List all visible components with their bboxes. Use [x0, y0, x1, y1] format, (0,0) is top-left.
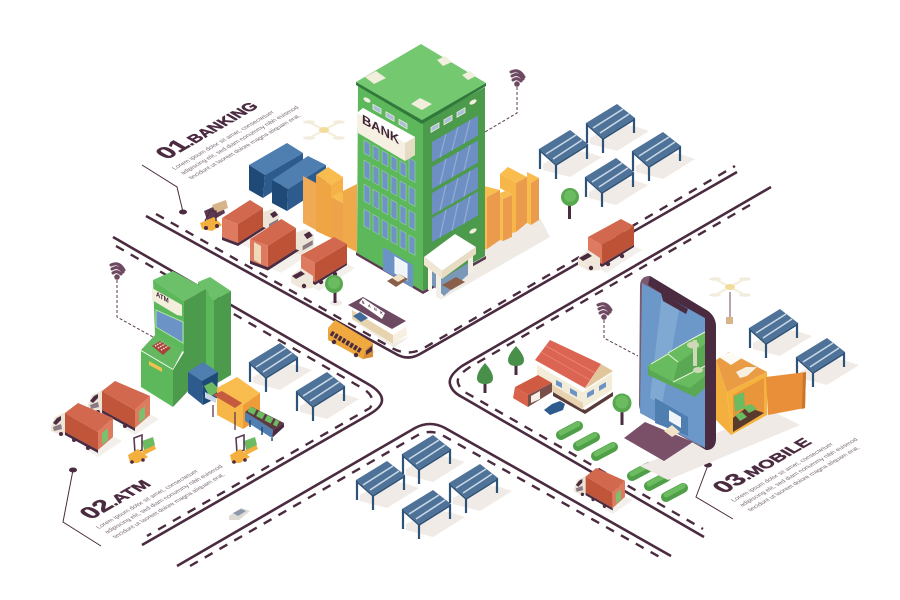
orange warehouse: left cluster: [303, 167, 357, 252]
road: bottom block: [177, 424, 671, 566]
leader dot: banking: [179, 210, 187, 214]
portico steps: [442, 277, 465, 290]
icon: wifi: [598, 304, 611, 320]
banknote strap: [693, 340, 697, 366]
console top: [141, 335, 183, 369]
body text: mobile: adipiscing elit, sed diam nonummy nibh euismod: [738, 437, 860, 508]
road: ATM block: [113, 237, 382, 545]
ATM machine: [141, 271, 231, 407]
phone door: [655, 398, 688, 436]
icon: wifi: [511, 71, 524, 87]
road: banking block: [146, 166, 737, 358]
red truck: front: [291, 237, 355, 291]
dotted connector: [485, 87, 517, 132]
drone: [709, 277, 751, 297]
red truck: ATM upper: [88, 381, 159, 435]
road network: [113, 166, 771, 566]
house side wall: [583, 373, 612, 408]
leader line: ATM: [63, 470, 101, 546]
tree: top right: [561, 188, 579, 219]
body text: banking: adipiscing elit, sed diam nonummy nibh euismod: [179, 105, 301, 176]
bank left windows: [364, 132, 415, 255]
safe interior: [733, 378, 764, 432]
house base: [553, 392, 613, 414]
kiosk sign text: BANK: [362, 299, 383, 316]
conveyor front: [245, 407, 284, 441]
safe top: [716, 352, 767, 392]
phone base plate: [624, 422, 693, 461]
ATM sign text: ATM: [156, 291, 169, 305]
safe with money: [640, 352, 806, 480]
ground shadow: bank plaza: [440, 218, 550, 300]
heading: 01.BANKING: 01.BANKING: [149, 96, 264, 163]
leader dot: ATM: [69, 468, 77, 472]
body text: ATM: adipiscing elit, sed diam nonummy nibh euismod: [103, 464, 225, 535]
BANK sign text: BANK: [362, 111, 400, 148]
bank upper small windows: [373, 104, 407, 129]
section: 02 ATM label: [63, 459, 234, 546]
forklift: ATM right: [230, 435, 258, 464]
red truck: mobile road: [574, 468, 632, 514]
small white car: [229, 508, 250, 520]
shipping containers: [249, 143, 326, 211]
road: mobile block: [450, 187, 771, 537]
house gable: [585, 364, 613, 389]
phone steps: [664, 425, 680, 437]
section: 03 mobile label: [696, 432, 869, 519]
bench: [353, 312, 368, 322]
phone: [624, 276, 716, 461]
body text: ATM: Lorem ipsum dolor sit amet, consectetuer: [95, 469, 200, 530]
main tower: [153, 271, 206, 407]
house roof: [535, 340, 601, 388]
garage: [513, 375, 552, 407]
house front wall: [537, 365, 583, 403]
banknote stack: [648, 332, 705, 397]
tether: [729, 292, 731, 318]
keypad: [152, 341, 171, 355]
heading: 02.ATM: 02.ATM: [73, 474, 156, 523]
pine trees: [477, 346, 524, 393]
BANK sign: [357, 108, 415, 161]
bank base: [356, 252, 486, 294]
house windows: [556, 380, 606, 398]
body text: banking: tincidunt ut laoreet dolore magna aliquam erat.: [187, 113, 303, 181]
section: 01 banking label: [142, 96, 310, 214]
hedges: [561, 424, 683, 497]
rear tower: [198, 277, 231, 385]
leader dot: mobile: [704, 462, 712, 468]
container: back: [249, 143, 303, 198]
icon: wifi: [111, 264, 124, 280]
phone notch: [661, 293, 688, 314]
solar panels: ATM group: [249, 343, 359, 421]
blue car: [544, 401, 565, 415]
bank left wall: [357, 85, 423, 291]
solar panels: mobile group: [749, 309, 859, 387]
blue press machine: [188, 362, 218, 405]
body text: mobile: tincidunt ut laoreet dolore magna aliquam erat.: [746, 445, 862, 513]
tree: mobile: [612, 394, 632, 425]
yellow bus: [328, 320, 375, 360]
leader line: mobile: [696, 465, 733, 519]
body text: ATM: tincidunt ut laoreet dolore magna aliquam erat.: [111, 472, 227, 540]
bank door: [383, 247, 413, 288]
safe front: [727, 372, 767, 435]
bus stop kiosk: [348, 297, 410, 348]
red truck: road: [578, 219, 642, 273]
kiosk front wall: [352, 310, 393, 344]
mobile wifi signal: [598, 304, 638, 356]
phone screen: [640, 283, 705, 448]
body text: banking: Lorem ipsum dolor sit amet, consectetuer: [171, 110, 276, 171]
phone frame: [639, 276, 716, 450]
tree: near bank: [325, 275, 343, 306]
safe left face: [716, 360, 731, 435]
drone with parcel: [709, 277, 751, 324]
safe door: [766, 372, 806, 415]
card slot: [149, 361, 162, 372]
portico columns: [428, 262, 432, 292]
ATM wifi signal: [111, 264, 153, 337]
forklift: banking: [200, 200, 228, 231]
conveyor rear: [204, 382, 220, 397]
roof vents: [365, 56, 476, 110]
rear doors: [254, 242, 261, 264]
solar panels: bottom group: [356, 435, 512, 539]
bank right glazed panels: [432, 115, 478, 242]
portico roof: [424, 234, 476, 271]
wall light pills: [363, 96, 477, 235]
shop posts: [213, 405, 235, 430]
kiosk sign: [359, 298, 385, 319]
icon: drone banking: [303, 120, 345, 140]
heading: 03.MOBILE: 03.MOBILE: [706, 432, 817, 497]
container: front: [272, 156, 326, 211]
safe paper: [719, 352, 742, 365]
orange warehouse: right cluster: [484, 167, 539, 250]
bank wifi signal: [485, 71, 524, 132]
parcel: [726, 317, 733, 324]
money machine and conveyor: [188, 362, 284, 441]
red truck: back: [222, 200, 279, 248]
solar panels: top group: [539, 104, 695, 207]
bank portico: [424, 234, 476, 299]
yellow shop: [213, 377, 260, 430]
leader line: banking: [142, 165, 183, 212]
body text: mobile: Lorem ipsum dolor sit amet, consectetuer: [730, 442, 835, 503]
kiosk roof: [348, 297, 406, 329]
house: [513, 340, 613, 415]
shop awning: [213, 391, 242, 408]
bank building: [356, 44, 486, 299]
kiosk side wall: [393, 327, 407, 344]
console front: [141, 351, 173, 407]
bank right wall: [423, 87, 485, 291]
dotted connector: [604, 320, 638, 356]
forklift: ATM left: [128, 435, 156, 464]
bank roof: [356, 44, 486, 120]
dotted connector: [117, 280, 153, 337]
red truck: middle: [250, 219, 314, 273]
money in safe: [734, 392, 757, 421]
ATM screen: [156, 310, 183, 343]
red truck: ATM lower: [51, 403, 122, 457]
